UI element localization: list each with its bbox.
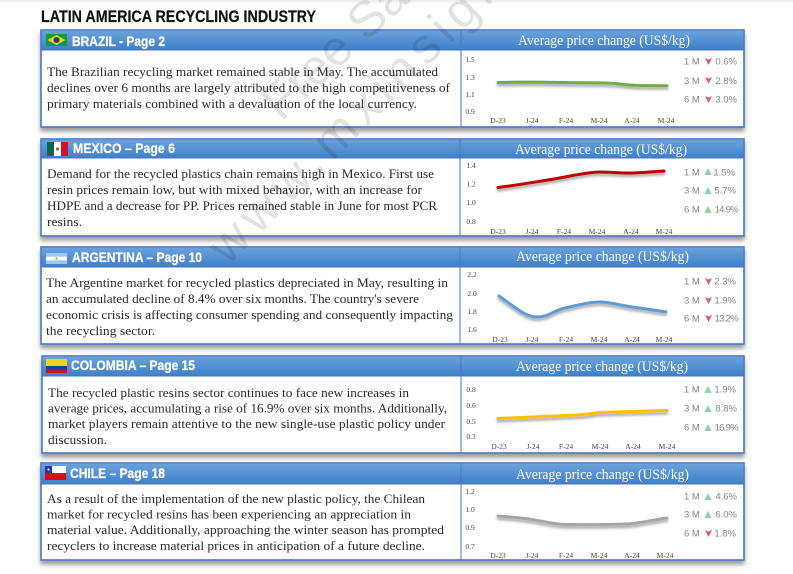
- heading: Colombia price change: Average price change (US$/kg): [516, 359, 688, 375]
- text block: Brazil: primary materials combined with a devaluation of the local currency.: [47, 96, 417, 111]
- heading: Brazil price change: Average price change (US$/kg): [518, 33, 690, 49]
- text block: Brazil: declines over 6 months are largely attributed to the high competitiveness of: [47, 80, 451, 95]
- stats: Chile: 1 M: [684, 492, 700, 502]
- heading: Chile: CHILE – Page 18: [70, 465, 165, 481]
- line chart: Mexico: 0.8: [466, 217, 476, 226]
- heading: Brazil: BRAZIL - Page 2: [72, 33, 165, 49]
- text block: Chile: material value. Additionally, approaching the winter season has prompted: [47, 522, 445, 537]
- panel: Colombia: [42, 356, 744, 453]
- heading: Argentina price change: Average price change (US$/kg): [516, 249, 689, 265]
- text block: Colombia: market players remain attentive to the new single-use plastic policy under: [48, 416, 446, 431]
- line chart: Colombia: [466, 385, 676, 451]
- line chart: Argentina: 1.6: [467, 325, 477, 334]
- stats: Colombia: [684, 384, 739, 434]
- stats: Brazil: 6 M: [684, 94, 700, 106]
- line chart: Chile: 0.7: [465, 542, 475, 551]
- line chart: Chile: M-24: [657, 551, 674, 560]
- stats: Mexico: 1 M: [684, 168, 700, 178]
- line chart: Brazil: 1.1: [465, 90, 475, 99]
- heading: Chile price change: Average price change (US$/kg): [516, 467, 689, 483]
- line chart: Colombia: 0.3: [466, 432, 476, 441]
- line chart: Argentina: 1.8: [467, 307, 477, 316]
- line chart: Colombia: M-24: [659, 442, 676, 451]
- stats: Argentina: [684, 276, 739, 324]
- line chart: Argentina: 2.0: [467, 289, 477, 298]
- line chart: Chile: 1.0: [465, 505, 475, 514]
- line chart: Mexico: A-24: [623, 227, 639, 236]
- line chart: Mexico: 1.4: [466, 161, 476, 170]
- line chart: Brazil: M-24: [658, 116, 675, 125]
- stats: Colombia: 6 M: [684, 422, 700, 434]
- text block: Colombia: [48, 385, 447, 447]
- text block: Mexico: resins.: [47, 214, 82, 229]
- stats: Mexico: 3 M: [684, 186, 700, 196]
- line chart: Argentina: M-24: [591, 335, 608, 344]
- line chart: Colombia: 0.8: [466, 385, 476, 394]
- icon: Argentina flag: [46, 253, 67, 264]
- text block: Argentina: economic crisis is affecting consumer spending and consequently impacting: [46, 307, 454, 322]
- text block: Colombia: The recycled plastic resins sector continues to face new increases in: [48, 385, 409, 400]
- line chart: Brazil: 1.5: [465, 55, 475, 64]
- line chart: Brazil: F-24: [559, 116, 573, 125]
- line chart: Argentina: 2.2: [467, 270, 477, 279]
- panel: Brazil: [41, 30, 744, 127]
- text block: Mexico: [47, 166, 437, 229]
- panel: Chile: [41, 463, 744, 560]
- text block: Chile: [47, 491, 445, 553]
- stats: Argentina: 2.3%: [714, 276, 737, 288]
- line chart: Colombia: 0.6: [466, 401, 476, 410]
- stats: Colombia: 8.8%: [715, 404, 738, 414]
- text block: Chile: As a result of the implementation of the new plastic policy, the Chilean: [47, 491, 425, 506]
- line chart: Mexico: M-24: [589, 227, 606, 236]
- text block: Mexico: HDPE and a decrease for PP. Prices remained stable in June for most PCR: [47, 198, 437, 213]
- stats: Colombia: 1 M: [684, 384, 700, 396]
- stats: Brazil: 1 M: [684, 56, 700, 68]
- stats: Argentina: 13.2%: [715, 314, 739, 324]
- icon: Colombia flag: [46, 359, 67, 373]
- stats: Chile: 3 M: [684, 510, 700, 520]
- line chart: Chile: A-24: [624, 551, 640, 560]
- text block: Brazil: [47, 64, 451, 111]
- stats: Chile: 4.6%: [715, 492, 738, 502]
- stats: Brazil: 0.6%: [715, 56, 738, 68]
- text block: Argentina: [46, 275, 454, 338]
- stats: Argentina: 3 M: [684, 296, 700, 306]
- line chart: Brazil: [465, 55, 675, 125]
- line chart: Argentina: A-24: [624, 335, 640, 344]
- stats: Brazil: 2.8%: [715, 76, 738, 87]
- line chart: Mexico: J-24: [526, 227, 539, 236]
- line chart: Argentina: F-24: [559, 335, 573, 344]
- stats: Argentina: 1 M: [684, 276, 700, 288]
- line chart: Mexico: 1.0: [466, 198, 476, 207]
- text block: Chile: recyclers to increase material prices in anticipation of a future decline.: [47, 538, 425, 553]
- line chart: Colombia: M-24: [592, 442, 609, 451]
- line chart: Colombia: D-23: [491, 442, 507, 451]
- stats: Brazil: [684, 56, 738, 106]
- line chart: Mexico: D-23: [490, 227, 506, 236]
- stats: Mexico: 1.5%: [713, 168, 736, 178]
- text block: Mexico: Demand for the recycled plastics chain remains high in Mexico. First use: [47, 166, 434, 181]
- heading: Mexico price change: Average price change (US$/kg): [515, 142, 687, 158]
- stats: Argentina: 1.9%: [714, 296, 737, 306]
- line chart: Chile: 1.2: [465, 487, 475, 496]
- line chart: Colombia: J-24: [527, 442, 540, 451]
- line chart: Colombia: A-24: [625, 442, 641, 451]
- stats: Mexico: 6 M: [684, 204, 700, 216]
- stats: Brazil: 3.0%: [715, 94, 738, 106]
- text block: Mexico: resin prices remain low, but with mixed behavior, with an increase for: [47, 182, 423, 197]
- line chart: Brazil: 0.9: [465, 107, 475, 116]
- line chart: Chile: F-24: [559, 551, 573, 560]
- line chart: Argentina: [467, 270, 673, 344]
- heading: Argentina: ARGENTINA – Page 10: [72, 249, 202, 265]
- icon: Brazil flag: [46, 34, 67, 46]
- stats: Mexico: 5.7%: [714, 186, 737, 196]
- line chart: Brazil: 1.3: [465, 73, 475, 82]
- stats: Chile: 6 M: [684, 528, 700, 540]
- text block: Colombia: average prices, accumulating a rise of 16.9% over six months. Additionally,: [48, 400, 447, 416]
- line chart: Brazil: J-24: [526, 116, 539, 125]
- stats: Mexico: [684, 168, 739, 216]
- line chart: Chile: [465, 487, 674, 560]
- text block: Colombia: discussion.: [48, 432, 107, 447]
- heading: Colombia: COLOMBIA – Page 15: [71, 357, 195, 373]
- line chart: Chile: J-24: [526, 551, 539, 560]
- stats: Colombia: 16.9%: [715, 422, 739, 434]
- stats: Brazil: 3 M: [684, 76, 700, 87]
- text block: Chile: market for recycled resins has been experiencing an appreciation in: [47, 506, 412, 522]
- line chart: Colombia: 0.5: [466, 417, 476, 426]
- line chart: Chile: D-23: [490, 551, 506, 560]
- line chart: Brazil: D-23: [490, 116, 506, 125]
- text block: Argentina: The Argentine market for recycled plastics depreciated in May, resulting in: [46, 275, 449, 290]
- heading: Mexico: MEXICO – Page 6: [73, 140, 175, 156]
- icon: Chile flag: [45, 466, 66, 480]
- text block: Argentina: the recycling sector.: [46, 323, 155, 338]
- icon: Mexico flag: [47, 142, 68, 156]
- stats: Chile: [684, 492, 738, 540]
- line chart: Mexico: [466, 161, 673, 236]
- text block: Brazil: The Brazilian recycling market remained stable in May. The accumulated: [47, 64, 439, 79]
- stats: Argentina: 6 M: [684, 314, 700, 324]
- stats: Chile: 1.8%: [714, 528, 737, 540]
- panel: Argentina: [41, 247, 744, 344]
- stats: Mexico: 14.9%: [715, 204, 739, 216]
- line chart: Brazil: M-24: [591, 116, 608, 125]
- stats: Chile: 6.0%: [715, 510, 738, 520]
- stats: Colombia: 1.9%: [714, 384, 737, 396]
- line chart: Mexico: 1.2: [466, 180, 476, 188]
- line chart: Mexico: M-24: [656, 227, 673, 236]
- line chart: Colombia: F-24: [559, 442, 573, 451]
- panel: Mexico: [41, 139, 744, 236]
- text block: Argentina: an accumulated decline of 8.4% over six months. The country's severe: [46, 291, 419, 306]
- line chart: Chile: 0.9: [465, 523, 475, 532]
- line chart: Argentina: M-24: [656, 335, 673, 344]
- stats: Colombia: 3 M: [684, 404, 700, 414]
- line chart: Argentina: J-24: [526, 335, 539, 344]
- title: LATIN AMERICA RECYCLING INDUSTRY: [41, 8, 316, 26]
- line chart: Brazil: A-24: [624, 116, 640, 125]
- line chart: Chile: M-24: [591, 551, 608, 560]
- line chart: Mexico: F-24: [557, 227, 571, 236]
- line chart: Argentina: D-23: [492, 335, 508, 344]
